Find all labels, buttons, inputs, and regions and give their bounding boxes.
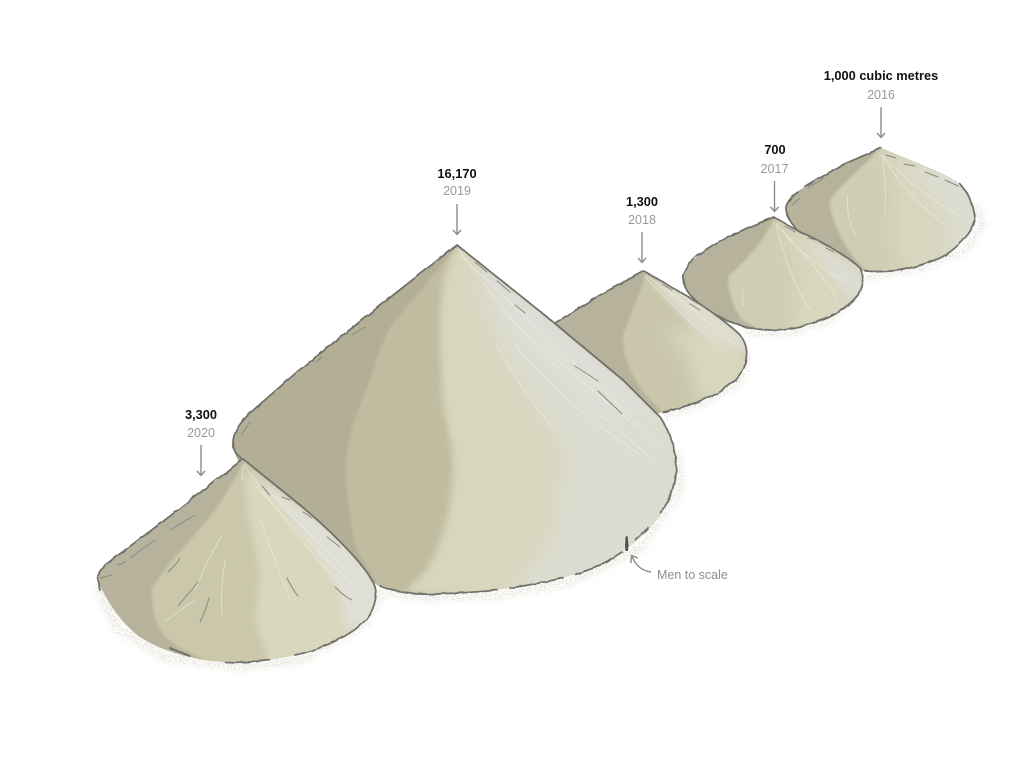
label: 2017 [761,142,788,212]
arrow 2018 [638,232,646,262]
label: 2016: 1,000 cubic metres [824,68,938,83]
annotation: men to scale: Men to scale [657,568,728,582]
mound: 2019 [225,240,690,600]
label: 2018: 1,300 [626,194,658,209]
mound: 2016 [780,140,985,285]
label: 2018: 2018 [628,213,656,227]
label: 2019 [437,166,477,234]
label: 2020: 3,300 [185,407,217,422]
curved arrow [631,556,651,572]
label: 2016: 2016 [867,88,895,102]
label: 2019: 16,170 [437,166,477,181]
label: 2020: 2020 [187,426,215,440]
man figure [625,536,628,551]
label: 2019: 2019 [443,184,471,198]
sand scatter 2016 [860,205,983,278]
sand scatter 2017 [745,290,860,335]
label: 2016 [824,68,938,138]
sand scatter 2020 [97,585,381,666]
arrow 2016 [877,107,885,138]
sand scatter 2019 [385,450,680,598]
mound: 2017 [678,212,870,337]
label: 2020 [185,407,217,476]
sand scatter 2018 [665,355,748,415]
mound: 2020 [90,455,385,670]
arrow 2020 [197,445,205,476]
label: 2017: 700 [764,142,786,157]
annotation: men to scale [631,556,728,582]
label: 2017: 2017 [761,162,788,176]
arrow 2019 [453,204,461,234]
mound: 2018 [550,265,755,420]
arrow 2017 [770,181,778,212]
label: 2018 [626,194,658,262]
